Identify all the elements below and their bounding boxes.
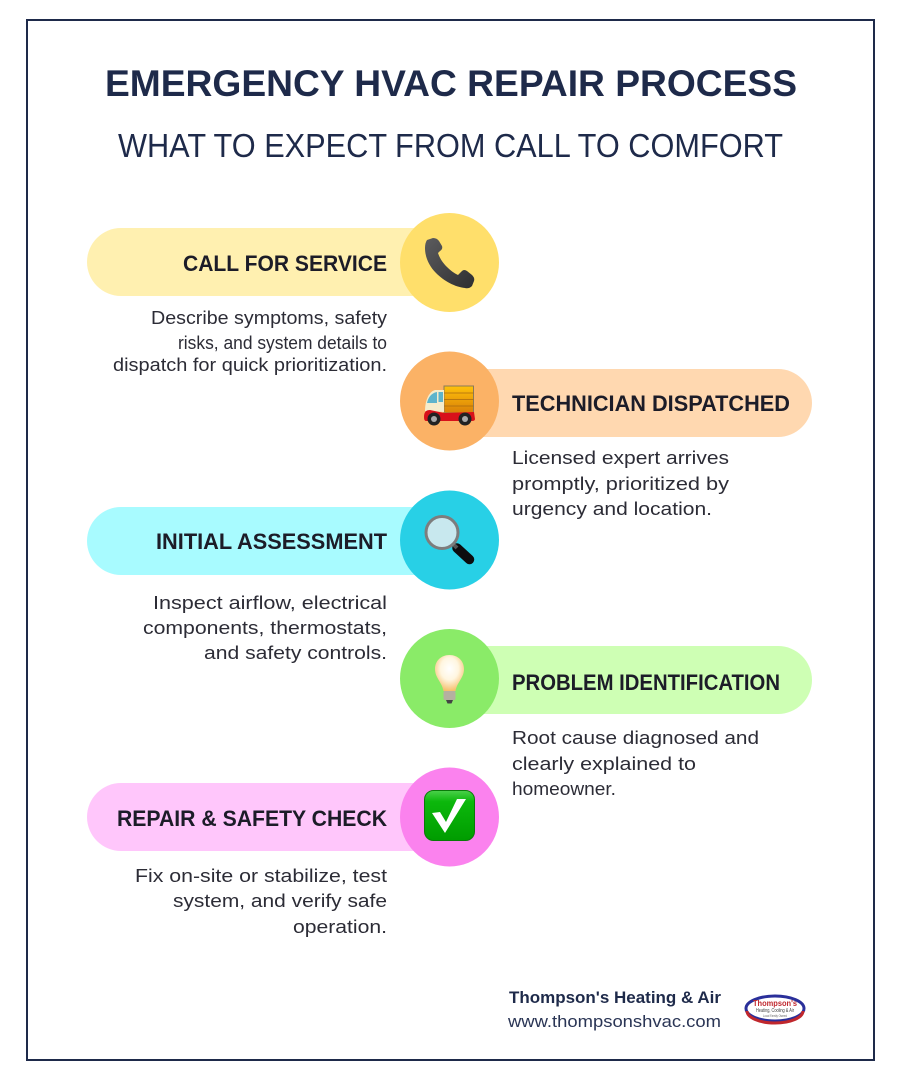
step 1: call for service — [87, 213, 499, 375]
circle: step 2 — [400, 352, 499, 450]
description: initial assessment: components, thermostats, — [143, 617, 387, 638]
icon: check mark — [424, 790, 474, 840]
logo: Local Family Owned — [763, 1014, 787, 1018]
description: call for service: dispatch for quick prioritization. — [113, 354, 387, 375]
icon: delivery truck — [424, 386, 475, 426]
description: technician dispatched: urgency and location. — [512, 498, 712, 519]
circle: step 5 — [400, 768, 499, 866]
circle: step 4 — [400, 629, 499, 728]
description: technician dispatched: promptly, prioritized by — [512, 473, 730, 494]
description: repair and safety check: operation. — [293, 916, 387, 937]
description: problem identification: homeowner. — [512, 778, 616, 799]
icon: magnifying glass — [426, 516, 470, 560]
description: call for service — [113, 307, 388, 375]
description: call for service: risks, and system details to — [178, 332, 387, 353]
step 5: repair and safety check — [87, 768, 499, 937]
description: repair and safety check — [135, 865, 387, 937]
description: problem identification: clearly explained to — [512, 753, 696, 774]
description: repair and safety check: system, and verify safe — [173, 890, 387, 911]
description: problem identification: Root cause diagnosed and — [512, 727, 759, 748]
logo: Heating, Cooling & Air — [756, 1008, 794, 1014]
description: call for service: Describe symptoms, safety — [151, 307, 388, 328]
step 3: initial assessment — [87, 490, 499, 663]
circle: step 1 — [400, 213, 499, 312]
logo — [746, 996, 804, 1023]
description: problem identification — [512, 727, 759, 799]
title: EMERGENCY HVAC REPAIR PROCESS — [105, 63, 797, 104]
footer: company — [507, 988, 804, 1031]
description: technician dispatched: Licensed expert arrives — [512, 447, 729, 468]
heading: technician dispatched: TECHNICIAN DISPATCHED — [512, 391, 790, 416]
icon: light bulb — [435, 655, 464, 704]
step 2: technician dispatched — [400, 352, 812, 519]
pill: repair and safety check — [87, 783, 477, 851]
description: repair and safety check: Fix on-site or stabilize, test — [135, 865, 387, 886]
heading: call for service: CALL FOR SERVICE — [183, 251, 387, 276]
subtitle: WHAT TO EXPECT FROM CALL TO COMFORT — [118, 127, 783, 164]
heading: initial assessment: INITIAL ASSESSMENT — [156, 529, 388, 554]
pill: initial assessment — [87, 507, 477, 575]
pill: problem identification — [430, 646, 812, 714]
description: initial assessment: Inspect airflow, electrical — [153, 592, 387, 613]
heading: problem identification: PROBLEM IDENTIFICATION — [512, 670, 780, 695]
step 4: problem identification — [400, 629, 812, 799]
description: technician dispatched — [512, 447, 730, 519]
icon: telephone — [425, 238, 474, 288]
pill: call for service — [87, 228, 477, 296]
pill: technician dispatched — [430, 369, 812, 437]
logo: Thompson's — [753, 999, 798, 1008]
description: initial assessment: and safety controls. — [204, 642, 387, 663]
heading: repair and safety check: REPAIR & SAFETY CHECK — [117, 806, 387, 831]
description: initial assessment — [143, 592, 387, 663]
website: www.thompsonshvac.com — [507, 1013, 721, 1031]
company name: Thompson's Heating & Air — [509, 988, 721, 1007]
circle: step 3 — [400, 490, 499, 590]
